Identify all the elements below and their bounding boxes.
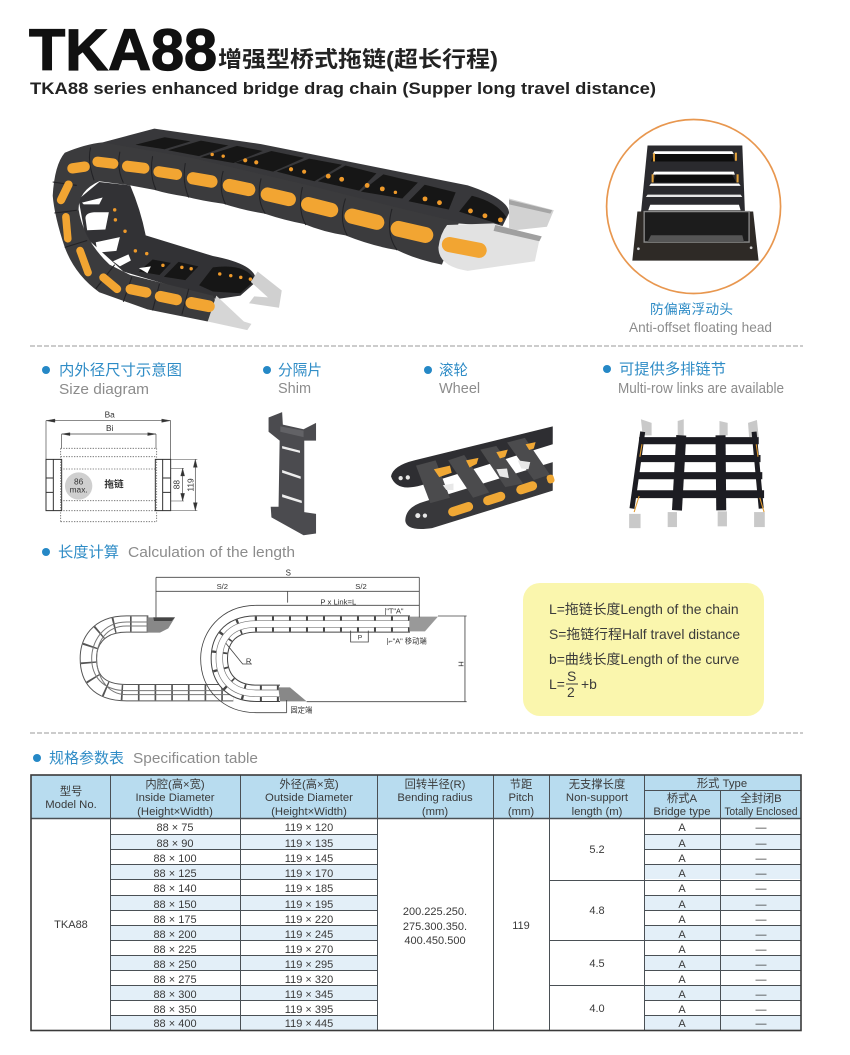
size diagram: 119 xyxy=(185,478,195,492)
chain length diagram: S/2 xyxy=(355,582,367,591)
table header text: 桥式A xyxy=(667,792,698,805)
formula box: S=拖链行程Half travel distance xyxy=(549,626,740,642)
table body: sizes: 119 × 245 xyxy=(285,929,333,941)
inset: floating head circle xyxy=(607,119,781,293)
table header text: Totally Enclosed xyxy=(724,806,798,818)
heading: multi-row links: 可提供多排链节 xyxy=(619,361,726,378)
table body: type columns: — xyxy=(756,989,766,1001)
table header text: Inside Diameter xyxy=(135,792,215,804)
heading: specification table: 规格参数表 xyxy=(49,750,124,767)
table header text: (mm) xyxy=(422,806,448,818)
formula box: b=曲线长度Length of the curve xyxy=(549,651,740,667)
table body: type columns: — xyxy=(756,1018,766,1030)
table body: type columns: A xyxy=(678,853,686,865)
subtitle: TKA88 series enhanced bridge drag chain (Supper long travel distance) xyxy=(30,79,656,98)
wheel chain photo xyxy=(391,426,555,529)
table header text: 全封闭B xyxy=(740,791,782,805)
table body: sizes: 119 × 185 xyxy=(285,883,333,895)
table header text: (mm) xyxy=(508,806,534,818)
chain length diagram xyxy=(88,569,467,714)
table body: merged cells: 200.225.250. xyxy=(403,906,467,918)
heading: wheel: 滚轮 xyxy=(439,362,468,379)
size diagram xyxy=(46,410,197,522)
table body: type columns: — xyxy=(756,853,766,865)
table body: sizes: 88 × 175 xyxy=(153,914,197,926)
table body: merged cells xyxy=(54,844,605,1015)
formula box: S xyxy=(567,668,576,684)
table header text: 形式 Type xyxy=(697,777,747,790)
table body: sizes: 119 × 195 xyxy=(285,899,333,911)
table body: merged cells: 119 xyxy=(512,920,530,932)
table body: sizes: 119 × 270 xyxy=(285,944,333,956)
table header text: Bending radius xyxy=(397,792,473,804)
multi-row chain photo xyxy=(629,419,765,528)
chain length diagram: S xyxy=(286,569,291,578)
table body: sizes: 88 × 200 xyxy=(153,929,197,941)
table body: sizes: 119 × 145 xyxy=(285,853,333,865)
table body: sizes: 88 × 140 xyxy=(153,883,197,895)
size diagram: Bi xyxy=(106,423,114,433)
heading: length calculation: 长度计算 xyxy=(58,543,119,561)
table body: sizes: 119 × 220 xyxy=(285,914,333,926)
table header background xyxy=(31,775,801,818)
table body: merged cells: TKA88 xyxy=(54,919,88,931)
table body: sizes: 119 × 345 xyxy=(285,989,333,1001)
table body: sizes: 119 × 445 xyxy=(285,1018,333,1030)
size diagram: 86 xyxy=(74,476,84,486)
table body: type columns: A xyxy=(678,989,686,1001)
chain length diagram: S/2 xyxy=(217,582,228,591)
table body: sizes: 88 × 250 xyxy=(153,959,197,971)
chain length diagram: P xyxy=(358,634,363,641)
heading: multi-row links xyxy=(603,361,784,397)
formula box: 2 xyxy=(567,684,575,700)
table body: sizes: 119 × 395 xyxy=(285,1004,333,1016)
table body: type columns: A xyxy=(678,1004,686,1016)
size diagram: Ba xyxy=(105,410,115,420)
table body: merged cells: 4.0 xyxy=(589,1003,605,1015)
size diagram: 拖链 xyxy=(104,478,124,490)
table header text: (Height×Width) xyxy=(137,806,213,818)
formula box: +b xyxy=(581,676,597,692)
table body: sizes: 88 × 100 xyxy=(153,853,197,865)
title: 增强型桥式拖链(超长行程) xyxy=(218,47,498,72)
table body: sizes: 88 × 350 xyxy=(153,1004,197,1016)
table body: merged cells: 4.5 xyxy=(589,958,605,970)
chain length diagram: |"T"A" xyxy=(384,606,404,615)
table body: sizes: 88 × 225 xyxy=(153,944,197,956)
chain length diagram: |⌐"A" 移动端 xyxy=(386,636,427,645)
table header text xyxy=(45,777,798,818)
table body: type columns: — xyxy=(756,883,766,895)
table body: sizes: 88 × 300 xyxy=(153,989,197,1001)
table body: type columns: A xyxy=(678,959,686,971)
size diagram: 88 xyxy=(172,480,182,489)
table body: type columns: — xyxy=(756,914,766,926)
formula box xyxy=(523,583,764,716)
table body: sizes: 88 × 75 xyxy=(156,822,194,834)
table header text: Pitch xyxy=(508,792,534,804)
end brackets xyxy=(147,617,438,701)
heading: size diagram: 内外径尺寸示意图 xyxy=(59,361,182,379)
left chain xyxy=(88,622,233,695)
table body: sizes: 88 × 90 xyxy=(156,838,194,850)
table body: sizes: 88 × 400 xyxy=(153,1018,197,1030)
table body: sizes: 88 × 275 xyxy=(153,974,197,986)
inset caption: 防偏离浮动头 xyxy=(650,301,733,317)
title: TKA88 xyxy=(29,18,217,83)
heading: size diagram xyxy=(42,361,182,398)
heading: shim: Shim xyxy=(278,381,311,397)
alternating row shading xyxy=(110,834,801,1030)
table body: type columns: A xyxy=(678,944,686,956)
heading: multi-row links: Multi-row links are available xyxy=(618,381,784,397)
shim photo xyxy=(269,412,316,535)
table body: sizes: 119 × 135 xyxy=(285,838,333,850)
moving chain xyxy=(219,624,410,693)
table header text: 无支撑长度 xyxy=(569,777,625,791)
table header text: Outside Diameter xyxy=(265,792,353,804)
table header text: 节距 xyxy=(510,778,532,791)
table body: type columns: A xyxy=(678,822,686,834)
chain length diagram: 固定端 xyxy=(290,705,312,714)
table body: merged cells: 275.300.350. xyxy=(403,921,467,933)
table body: type columns: A xyxy=(678,914,686,926)
table body: type columns: A xyxy=(678,899,686,911)
heading: length calculation xyxy=(42,543,295,561)
heading: wheel xyxy=(424,362,480,397)
table body: type columns: — xyxy=(756,838,766,850)
formula box: L= xyxy=(549,676,565,692)
table header text: (Height×Width) xyxy=(271,806,347,818)
table header text: length (m) xyxy=(572,806,623,818)
table body: type columns: — xyxy=(756,944,766,956)
heading: specification table: Specification table xyxy=(133,751,258,767)
table body: type columns: A xyxy=(678,838,686,850)
table body: sizes: 119 × 170 xyxy=(285,868,333,880)
table body: type columns xyxy=(678,822,766,1030)
chain length diagram: P x Link=L xyxy=(320,597,356,606)
table body: type columns: A xyxy=(678,974,686,986)
table header text: 内腔(高×宽) xyxy=(145,777,205,791)
table body: sizes: 119 × 295 xyxy=(285,959,333,971)
heading: specification table xyxy=(33,750,258,767)
table body: type columns: A xyxy=(678,883,686,895)
table header text: 回转半径(R) xyxy=(405,777,466,791)
table body: type columns: A xyxy=(678,929,686,941)
table body: sizes: 119 × 320 xyxy=(285,974,333,986)
table body: type columns: — xyxy=(756,1004,766,1016)
inset caption: Anti-offset floating head xyxy=(629,319,772,335)
table header text: Non-support xyxy=(566,792,629,804)
table body: merged cells: 4.8 xyxy=(589,905,605,917)
heading: wheel: Wheel xyxy=(439,381,480,397)
dimension lines xyxy=(156,577,467,713)
table body: type columns: — xyxy=(756,868,766,880)
table header text: 外径(高×宽) xyxy=(279,777,339,791)
heading: shim xyxy=(263,362,322,397)
table body: type columns: — xyxy=(756,959,766,971)
title xyxy=(29,18,498,83)
table body: type columns: A xyxy=(678,1018,686,1030)
table body: type columns: — xyxy=(756,929,766,941)
size diagram: max. xyxy=(70,485,88,495)
table body: sizes: 119 × 120 xyxy=(285,822,333,834)
table body: type columns: A xyxy=(678,868,686,880)
table body: sizes: 88 × 125 xyxy=(153,868,197,880)
formula box: L=拖链长度Length of the chain xyxy=(549,601,739,617)
table body: type columns: — xyxy=(756,822,766,834)
table body: sizes xyxy=(153,822,333,1030)
inset caption xyxy=(629,301,772,335)
table header text: Model No. xyxy=(45,799,97,811)
chain length diagram: R xyxy=(246,657,252,666)
specification table xyxy=(31,775,801,1030)
table body: type columns: — xyxy=(756,899,766,911)
heading: length calculation: Calculation of the length xyxy=(128,545,295,561)
table header text: Bridge type xyxy=(653,806,711,818)
table body: merged cells: 5.2 xyxy=(589,844,605,856)
table body: merged cells: 400.450.500 xyxy=(404,935,466,947)
heading: shim: 分隔片 xyxy=(278,362,322,379)
main photo: drag chain xyxy=(53,129,554,330)
table header text: 型号 xyxy=(60,784,82,798)
table body: sizes: 88 × 150 xyxy=(153,899,197,911)
chain length diagram: H xyxy=(457,661,466,667)
table body: type columns: — xyxy=(756,974,766,986)
heading: size diagram: Size diagram xyxy=(59,382,149,398)
